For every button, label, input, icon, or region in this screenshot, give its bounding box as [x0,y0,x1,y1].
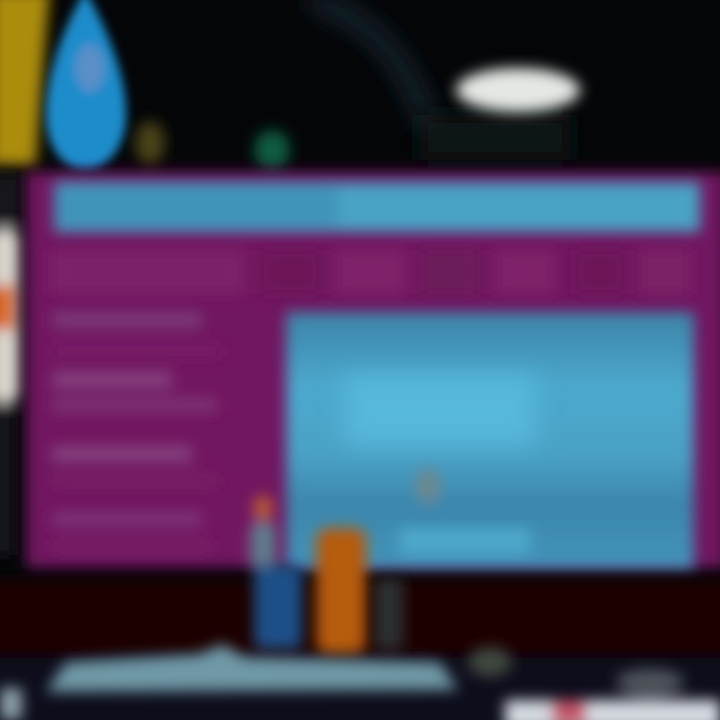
subheading text row [50,250,690,294]
foreground: white and red items bottom right [0,669,720,720]
icon: green object [254,130,290,170]
panel: purple display board [26,172,720,569]
heading band [54,182,700,232]
foreground: pale blue table [46,644,512,692]
ceiling light [456,68,580,112]
icon: olive object [135,121,165,165]
left edge white and orange object [0,175,20,555]
figure: dark figure behind [374,578,404,650]
text block: left column [52,312,222,552]
floor: dark maroon band [0,580,720,720]
figure: person in orange [316,528,366,654]
panel: blue screen [286,312,694,569]
figure: person in blue [250,495,302,649]
icon: small grey mark on screen [415,468,441,504]
icon: yellow banner top left [0,0,50,165]
icon: blue surfboard [46,0,126,170]
